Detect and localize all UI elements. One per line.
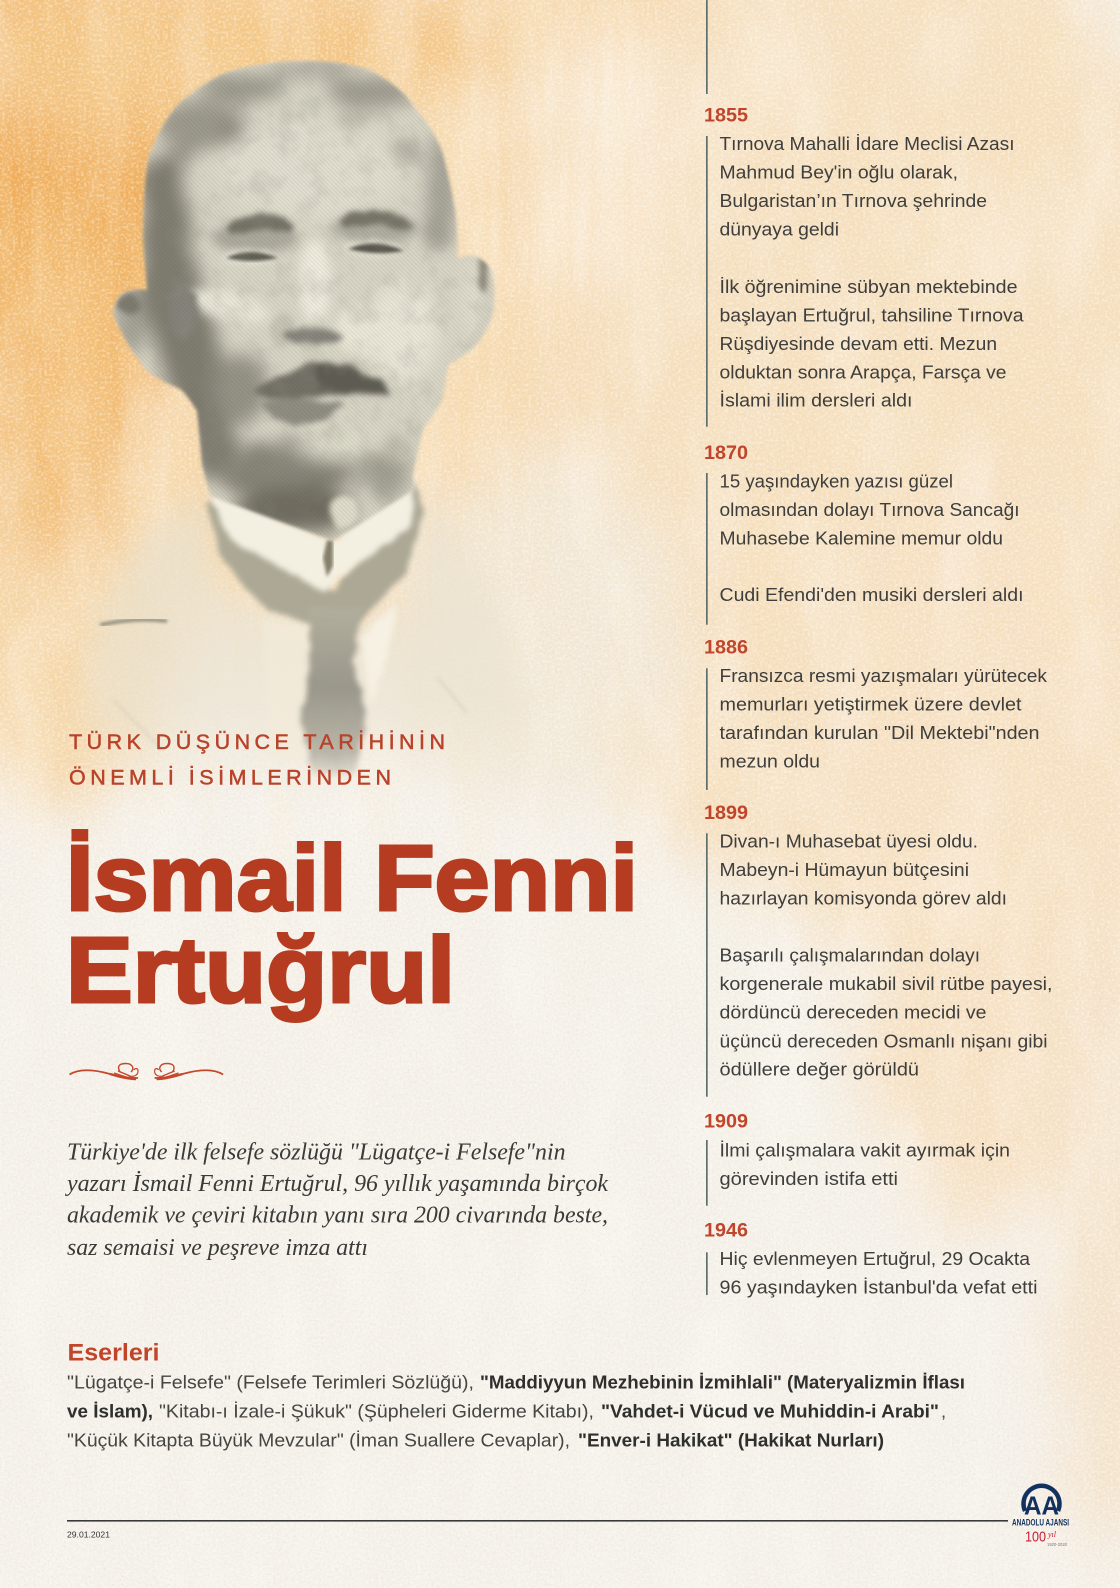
logo: Anadolu Ajansı: AA (1024, 1490, 1059, 1520)
works text: "Enver-i Hakikat" (Hakikat Nurları) (578, 1430, 884, 1450)
portrait: İsmail Fenni Ertuğrul (84, 50, 530, 800)
portrait collar (208, 476, 414, 592)
timeline entry 1946: 1946 (704, 1220, 748, 1241)
logo: Anadolu Ajansı: yıl (1047, 1530, 1057, 1539)
timeline top line (706, 0, 708, 94)
timeline entry 1855: Rüşdiyesinde devam etti. Mezun (720, 333, 997, 354)
timeline entry 1855: Bulgaristan’ın Tırnova şehrinde (720, 190, 987, 211)
timeline entry 1946: Hiç evlenmeyen Ertuğrul, 29 Ocakta (720, 1248, 1031, 1269)
timeline entry 1946 (704, 1220, 1038, 1297)
intro paragraph: yazarı İsmail Fenni Ertuğrul, 96 yıllık yaşamında birçok (65, 1171, 608, 1197)
portrait coat (84, 490, 530, 800)
face eyes (226, 243, 404, 261)
timeline entry 1899: üçüncü dereceden Osmanlı nişanı gibi (720, 1030, 1048, 1051)
timeline entry 1899: Başarılı çalışmalarından dolayı (720, 945, 980, 966)
portrait shirt (262, 603, 397, 760)
intro paragraph: Türkiye'de ilk felsefe sözlüğü "Lügatçe-i Felsefe"nin (67, 1139, 566, 1165)
works text: "Vahdet-i Vücud ve Muhiddin-i Arabi" (601, 1400, 939, 1422)
works text: "Kitabı-ı İzale-i Şükuk" (Şüpheleri Giderme Kitabı), (159, 1400, 594, 1422)
logo: Anadolu Ajansı: 100 (1025, 1528, 1046, 1546)
timeline entry 1946: 96 yaşındayken İstanbul'da vefat etti (720, 1276, 1038, 1297)
timeline entry 1870: olmasından dolayı Tırnova Sancağı (720, 499, 1020, 520)
timeline entry 1899: 1899 (704, 803, 748, 824)
timeline entry 1855: 1855 (704, 106, 748, 127)
timeline entry 1899: korgenerale mukabil sivil rütbe payesi, (720, 973, 1052, 994)
face beard and hair flecks (167, 113, 441, 492)
timeline entry 1899: Mabeyn-i Hümayun bütçesini (720, 859, 969, 880)
works heading: Eserleri (68, 1340, 160, 1367)
intro paragraph (65, 1139, 608, 1261)
works text (67, 1372, 965, 1450)
timeline entry 1899: dördüncü dereceden mecidi ve (720, 1002, 986, 1023)
timeline entry 1886: memurları yetiştirmek üzere devlet (720, 693, 1022, 714)
portrait tie (300, 608, 367, 775)
timeline entry 1909: 1909 (704, 1111, 748, 1132)
logo: Anadolu Ajansı: 1920-2020 (1047, 1542, 1067, 1547)
timeline entry 1899: hazırlayan komisyonda görev aldı (720, 887, 1007, 908)
face broad shading (115, 62, 490, 534)
kicker heading: TÜRK DÜŞÜNCE TARİHİNİN (69, 730, 445, 754)
timeline entry 1886: Fransızca resmi yazışmaları yürütecek (720, 665, 1048, 686)
portrait pocket line (100, 620, 167, 625)
timeline entry 1886: 1886 (704, 637, 748, 658)
kicker heading (69, 730, 445, 789)
title (66, 826, 638, 1022)
timeline entry 1899: Divan-ı Muhasebat üyesi oldu. (720, 831, 978, 852)
timeline entry 1855: dünyaya geldi (720, 218, 839, 240)
date: 29.01.2021 (67, 1530, 111, 1539)
works text: "Küçük Kitapta Büyük Mevzular" (İman Suallere Cevaplar), (67, 1430, 570, 1450)
ornament: flourish (70, 1064, 223, 1079)
timeline entry 1870: 15 yaşındayken yazısı güzel (720, 471, 953, 492)
timeline entry 1899 (704, 803, 1052, 1097)
portrait head (100, 50, 500, 550)
kicker heading: ÖNEMLİ İSİMLERİNDEN (69, 765, 391, 789)
intro paragraph: akademik ve çeviri kitabın yanı sıra 200 civarında beste, (67, 1203, 608, 1229)
works text: ve İslam), (67, 1400, 153, 1422)
title: İsmail Fenni (66, 826, 638, 930)
timeline entry 1870: 1870 (704, 443, 748, 464)
face highlights (184, 214, 419, 356)
logo: Anadolu Ajansı (1012, 1486, 1069, 1547)
timeline entry 1909: İlmi çalışmalara vakit ayırmak için (720, 1140, 1010, 1161)
timeline entry 1870 (704, 443, 1024, 625)
timeline entry 1886: mezun oldu (720, 750, 820, 771)
portrait coat faint lines (113, 677, 467, 747)
timeline entry 1886: tarafından kurulan "Dil Mektebi"nden (720, 722, 1040, 743)
logo: Anadolu Ajansı: ANADOLU AJANSI (1012, 1518, 1069, 1528)
timeline entry 1870: Cudi Efendi'den musiki dersleri aldı (720, 584, 1024, 605)
timeline entry 1855: İslami ilim dersleri aldı (720, 390, 912, 411)
timeline entry 1909 (704, 1111, 1010, 1206)
timeline entry 1855 (704, 106, 1024, 427)
works text: , (941, 1400, 946, 1422)
portrait collar notch (323, 540, 333, 577)
timeline entry 1855: olduktan sonra Arapça, Farsça ve (720, 361, 1006, 382)
timeline entry 1886 (704, 637, 1048, 790)
timeline entry 1855: Mahmud Bey'in oğlu olarak, (720, 162, 958, 182)
timeline entry 1855: Tırnova Mahalli İdare Meclisi Azası (720, 133, 1014, 154)
timeline entry 1855: İlk öğrenimine sübyan mektebinde (720, 276, 1018, 297)
title: Ertuğrul (66, 918, 455, 1022)
timeline entry 1909: görevinden istifa etti (720, 1168, 898, 1189)
timeline entry 1870: Muhasebe Kalemine memur oldu (720, 527, 1003, 548)
portrait waistcoat shadow (207, 480, 424, 623)
works text: "Maddiyyun Mezhebinin İzmihlali" (Materyalizmin İflası (480, 1372, 965, 1392)
intro paragraph: saz semaisi ve peşreve imza attı (67, 1235, 368, 1261)
timeline entry 1899: ödüllere değer görüldü (720, 1059, 919, 1080)
footer rule (67, 1520, 1008, 1522)
face features (116, 210, 488, 530)
timeline entry 1855: başlayan Ertuğrul, tahsiline Tırnova (720, 304, 1024, 326)
works text: "Lügatçe-i Felsefe" (Felsefe Terimleri Sözlüğü), (67, 1372, 474, 1392)
